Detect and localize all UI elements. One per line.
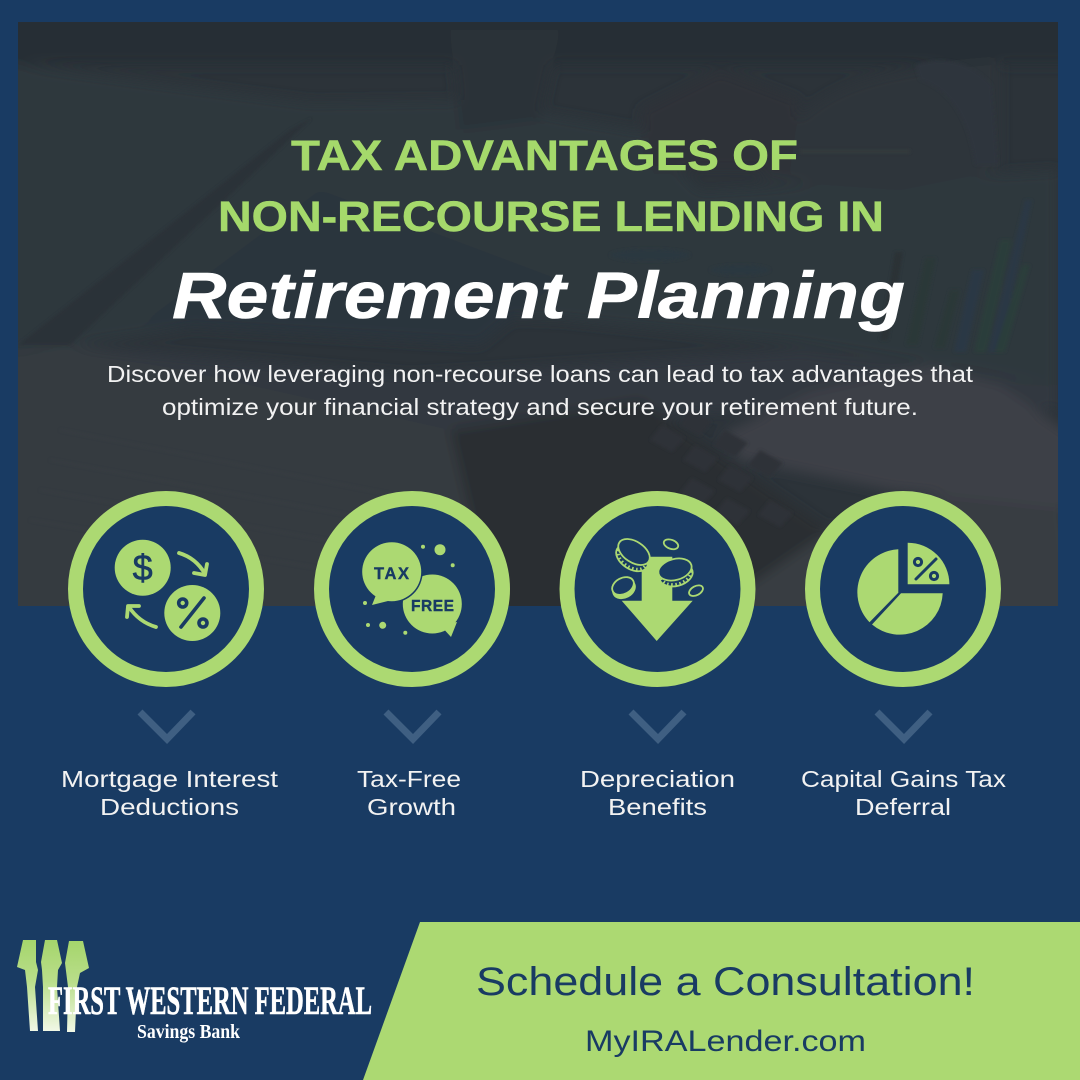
label 1: Mortgage Interest bbox=[61, 766, 279, 792]
panel: darkened photo background bbox=[0, 10, 1080, 620]
label 4: Deferral bbox=[855, 794, 951, 820]
benefit: depreciation benefits bbox=[567, 498, 748, 820]
icon ring 3 bbox=[567, 498, 748, 680]
intro paragraph: optimize your financial strategy and secure your retirement future. bbox=[162, 394, 918, 420]
benefit: tax-free growth bbox=[322, 498, 502, 820]
calculator keys bbox=[726, 434, 781, 468]
photo pen and cuff details bbox=[26, 341, 68, 343]
icon ring 1 bbox=[76, 498, 256, 680]
label 1: Deductions bbox=[100, 794, 239, 820]
icon: pie chart with percent slice bbox=[857, 543, 949, 635]
icon: tax free speech bubbles bbox=[361, 541, 462, 637]
chevron 2 bbox=[386, 712, 439, 739]
icon: tax free speech bubbles: TAX bbox=[374, 565, 409, 583]
logo wordmark: FIRST WESTERN FEDERAL bbox=[48, 978, 372, 1023]
title: tax advantages: TAX ADVANTAGES OF bbox=[291, 133, 798, 180]
intro paragraph bbox=[107, 361, 974, 420]
label 1 bbox=[61, 766, 279, 820]
icon: coins and down arrow bbox=[609, 534, 705, 641]
title: tax advantages: NON-RECOURSE LENDING IN bbox=[218, 194, 884, 241]
spreadsheet texture bbox=[30, 430, 450, 590]
icon: tax free speech bubbles: FREE bbox=[411, 598, 454, 615]
logo subline: Savings Bank bbox=[137, 1021, 241, 1043]
label 3 bbox=[580, 766, 735, 820]
photo chart bars bbox=[883, 203, 1028, 344]
chevron 1 bbox=[140, 712, 193, 739]
label 4 bbox=[801, 766, 1006, 820]
icon: dollar and percent exchange: $ bbox=[133, 547, 153, 588]
label 4: Capital Gains Tax bbox=[801, 766, 1006, 792]
benefit: mortgage interest deductions bbox=[61, 498, 279, 820]
chevron 4 bbox=[877, 712, 930, 739]
label 3: Benefits bbox=[608, 794, 707, 820]
intro paragraph: Discover how leveraging non-recourse loans can lead to tax advantages that bbox=[107, 361, 974, 387]
label 2: Tax-Free bbox=[357, 766, 461, 792]
call to action panel bbox=[363, 922, 1080, 1080]
label 2 bbox=[357, 766, 461, 820]
logo: First Western Federal Savings Bank bbox=[17, 940, 372, 1043]
icon: dollar and percent exchange bbox=[115, 540, 220, 641]
benefit: capital gains tax deferral bbox=[801, 498, 1006, 820]
icon ring 2 bbox=[322, 498, 502, 680]
title: retirement planning: Retirement Planning bbox=[172, 258, 905, 332]
title: tax advantages bbox=[218, 133, 884, 241]
icon ring 4 bbox=[812, 498, 994, 680]
label 2: Growth bbox=[367, 794, 456, 820]
CTA heading: Schedule a Consultation! bbox=[476, 960, 975, 1004]
CTA website: MyIRALender.com bbox=[585, 1025, 866, 1058]
label 3: Depreciation bbox=[580, 766, 735, 792]
chevron 3 bbox=[631, 712, 684, 739]
logo mark bbox=[17, 940, 89, 1032]
